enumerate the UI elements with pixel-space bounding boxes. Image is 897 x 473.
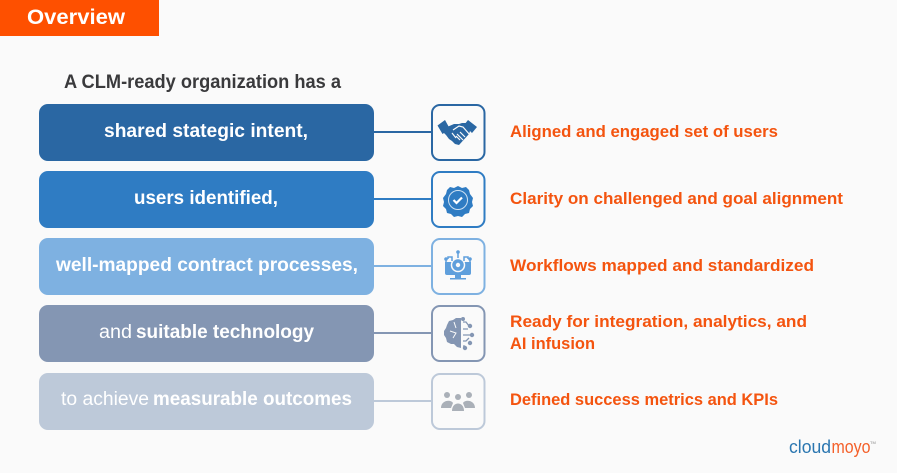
outcome text [510, 312, 807, 353]
icon: AI brain [432, 306, 484, 361]
outcome text: Ready for integration, analytics, and [510, 312, 807, 331]
bar label: suitable technology [136, 322, 314, 343]
outcome text: AI infusion [510, 334, 595, 353]
row 2: users identified [39, 171, 843, 228]
header tab: Overview: Overview [27, 6, 126, 29]
bar label: well-mapped contract processes, [55, 255, 358, 276]
row 3: well-mapped contract processes [39, 238, 814, 295]
intro heading: A CLM-ready organization has a [64, 72, 341, 93]
bar label: shared stategic intent, [104, 121, 308, 142]
bar label: measurable outcomes [153, 389, 352, 410]
icon: badge with check [432, 172, 484, 227]
outcome text: Clarity on challenged and goal alignment [510, 189, 843, 208]
bar label: and [99, 322, 132, 343]
logo: cloudmoyo: moyo [832, 437, 870, 457]
bar label [39, 373, 374, 430]
row 5: measurable outcomes [39, 373, 778, 430]
row 1: shared strategic intent [39, 104, 778, 161]
bar label: users identified, [134, 188, 278, 209]
connector line [374, 400, 432, 402]
icon: monitor with gear [432, 239, 484, 294]
header tab: Overview [0, 0, 159, 36]
connector line [374, 265, 432, 267]
bar label: to achieve [61, 389, 149, 410]
bar label [39, 104, 374, 161]
outcome text: Defined success metrics and KPIs [510, 390, 778, 409]
icon: handshake [432, 105, 484, 160]
connector line [374, 332, 432, 334]
logo: cloudmoyo: cloud [789, 437, 831, 457]
bar label [39, 171, 374, 228]
outcome text: Workflows mapped and standardized [510, 256, 814, 275]
connector line [374, 198, 432, 200]
bar label [39, 238, 374, 295]
logo: cloudmoyo: TM [870, 440, 876, 445]
bar label [39, 305, 374, 362]
logo: cloudmoyo [789, 437, 876, 457]
icon: group of people [432, 374, 484, 429]
connector line [374, 131, 432, 133]
row 4: suitable technology [39, 305, 807, 362]
outcome text: Aligned and engaged set of users [510, 122, 778, 141]
